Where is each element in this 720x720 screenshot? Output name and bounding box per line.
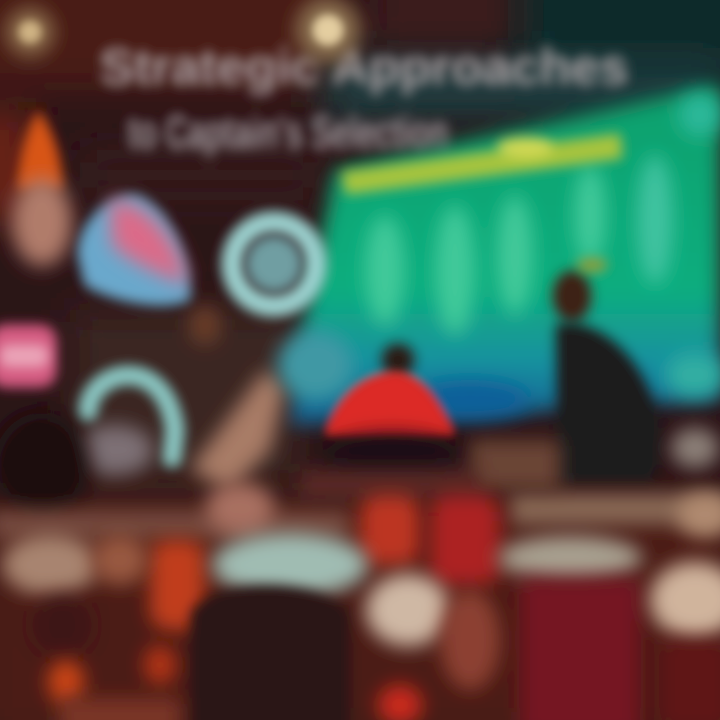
heading: blurred title: Strategic Approaches bbox=[100, 39, 628, 95]
figure: pointing arm bbox=[189, 305, 353, 490]
figure: presenter in dark suit bbox=[552, 258, 719, 482]
icon: orange flame / bottle bbox=[12, 110, 72, 266]
heading: blurred title: to Captain's Selection bbox=[128, 106, 448, 158]
figure: seated person silhouette left bbox=[0, 413, 90, 517]
table: foreground table edge bbox=[0, 440, 720, 540]
icon: pink and blue cloud chart bbox=[78, 195, 190, 305]
figure: person in red bbox=[322, 343, 462, 482]
icon: pink label bbox=[0, 325, 56, 387]
foreground: red glasses and plates bbox=[2, 482, 720, 720]
icon: teal ring gauge bbox=[232, 222, 316, 306]
icon: teal arc bbox=[77, 375, 175, 475]
panel: green screen bbox=[290, 85, 720, 425]
highlighted yellow banner bbox=[342, 134, 622, 194]
heading: blurred title bbox=[100, 39, 628, 158]
icon: ceiling lights bbox=[6, 0, 360, 62]
